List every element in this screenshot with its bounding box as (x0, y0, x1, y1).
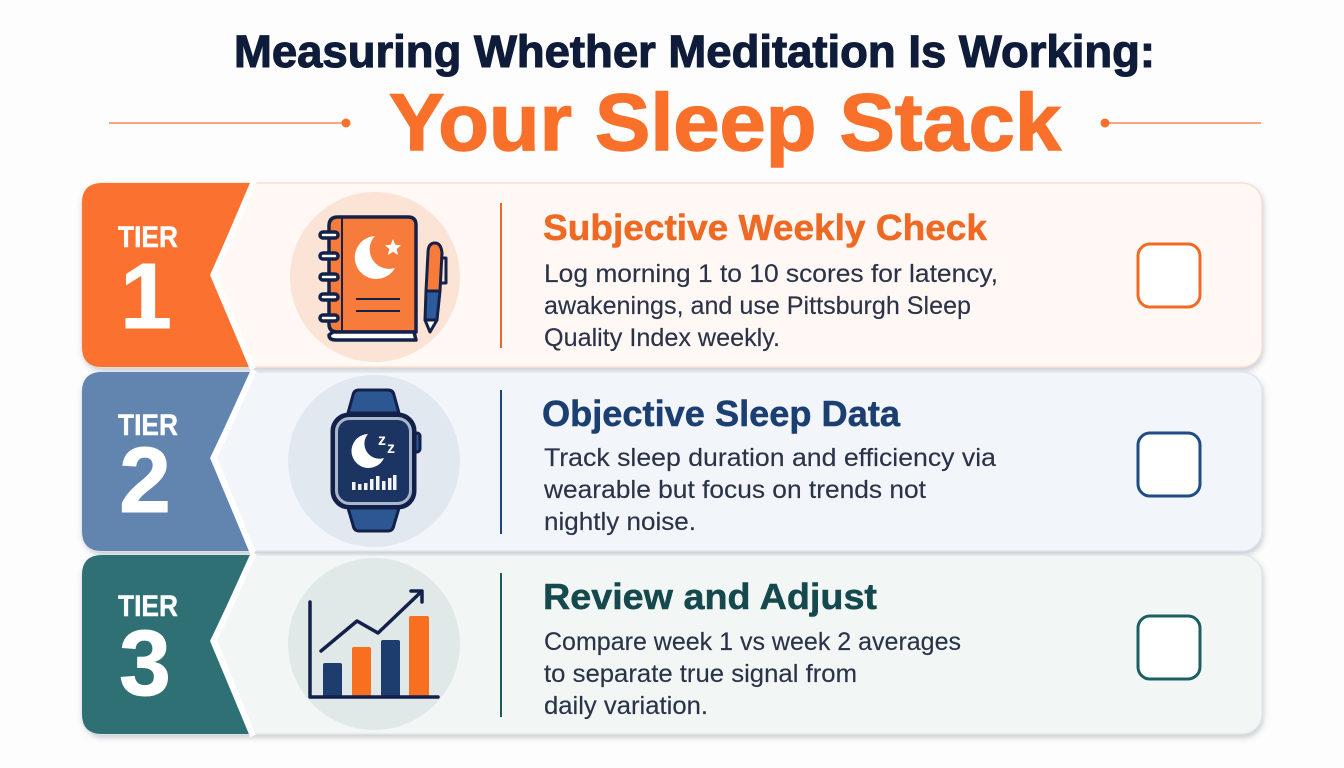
text: tier 2 description: nightly noise. (544, 508, 696, 536)
tier 2 badge (82, 370, 254, 553)
text: tier 1 description: Quality Index weekly. (544, 324, 780, 352)
tier 2 badge: TIER (118, 409, 178, 442)
text: tier 1 description: awakenings, and use Pittsburgh Sleep (544, 292, 971, 320)
tier 3 badge: TIER (118, 590, 178, 623)
checkbox: tier 1 (1138, 244, 1200, 307)
panel: tier 1 (82, 181, 1262, 369)
tier 3 badge (82, 553, 254, 736)
icon: smartwatch: z (387, 440, 395, 457)
text: tier 2 description: wearable but focus on trends not (543, 476, 926, 504)
heading: tier 1: Subjective Weekly Check (543, 207, 988, 248)
checkbox: tier 2 (1138, 433, 1200, 496)
text: tier 1 description (544, 260, 998, 352)
icon: smartwatch (288, 375, 460, 547)
icon: notebook and pen (290, 192, 460, 362)
checkbox: tier 3 (1138, 616, 1200, 679)
tier 1 badge (82, 181, 254, 369)
title line 2: Your Sleep Stack (389, 78, 1062, 168)
heading: tier 2: Objective Sleep Data (542, 393, 901, 434)
icon: smartwatch: z (378, 432, 386, 449)
tier 1 badge: 1 (120, 244, 172, 348)
text: tier 2 description (543, 444, 996, 536)
tier 3 badge: 3 (119, 611, 171, 715)
title (234, 26, 1155, 168)
heading: tier 3: Review and Adjust (543, 576, 877, 617)
tier 2 badge: 2 (119, 428, 171, 532)
text: tier 2 description: Track sleep duration and efficiency via (544, 444, 996, 472)
text: tier 3 description: to separate true signal from (544, 660, 857, 688)
panel: tier 3 (82, 553, 1262, 736)
text: tier 1 description: Log morning 1 to 10 scores for latency, (544, 260, 998, 288)
text: tier 3 description (544, 628, 961, 720)
title line 1: Measuring Whether Meditation Is Working: (234, 26, 1155, 77)
text: tier 3 description: Compare week 1 vs week 2 averages (544, 628, 961, 656)
text: tier 3 description: daily variation. (544, 692, 708, 720)
tier 1 badge: TIER (118, 221, 178, 254)
icon: bar chart with arrow (288, 558, 460, 730)
panel: tier 2 (82, 370, 1262, 553)
